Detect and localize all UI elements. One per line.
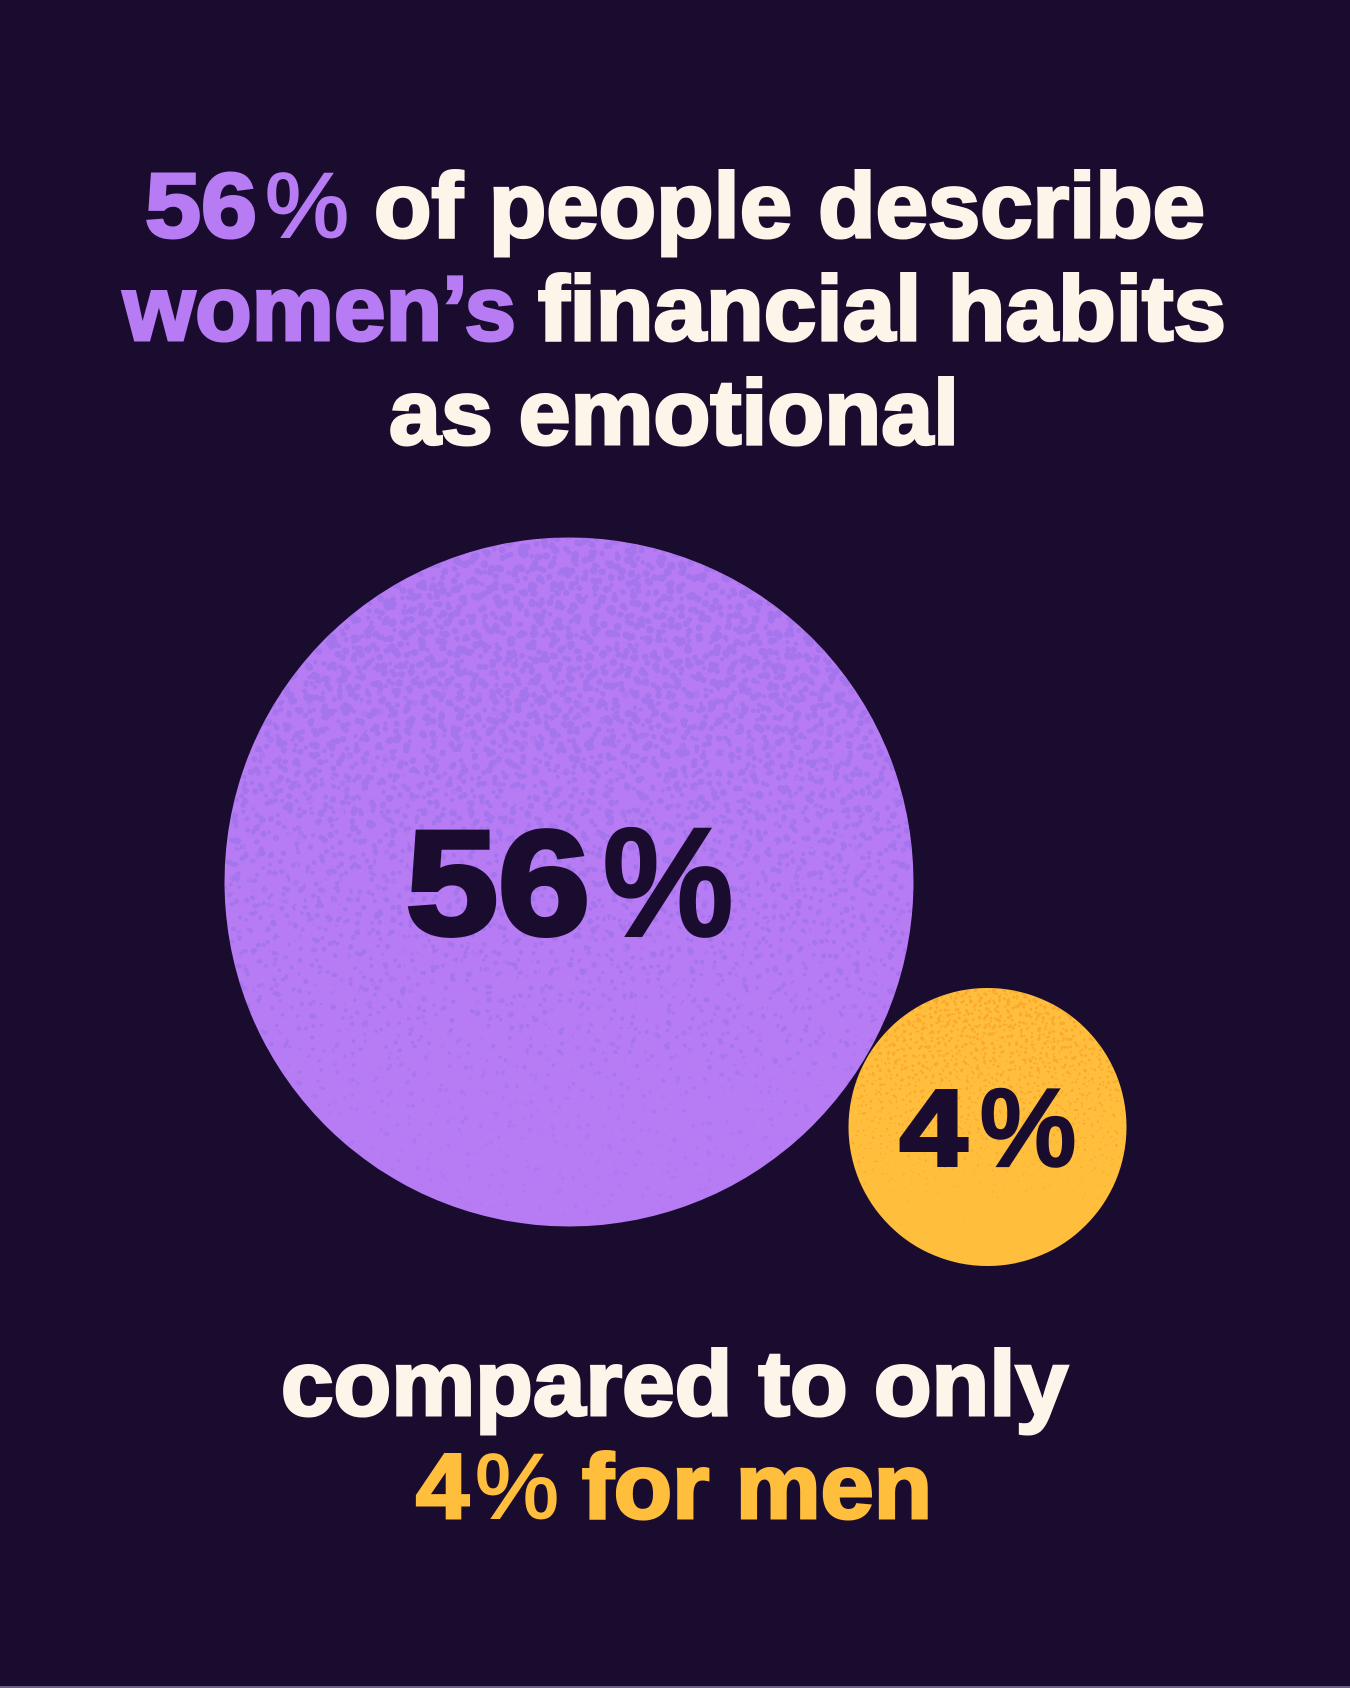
- title: [122, 155, 1226, 464]
- comparison caption: 4: [416, 1436, 469, 1538]
- value: 56%: 56: [406, 801, 590, 966]
- value: 56%: %: [603, 798, 733, 966]
- title: %: [265, 155, 349, 257]
- value: 4%: [900, 1067, 1076, 1188]
- comparison caption: [281, 1333, 1068, 1538]
- circle: 4% men: [848, 988, 1127, 1267]
- circle: 56% women: [224, 537, 914, 1227]
- title: women’s: [122, 258, 516, 360]
- comparison caption: compared to only: [281, 1333, 1068, 1435]
- title: financial habits: [538, 258, 1226, 360]
- comparison caption: %: [475, 1436, 559, 1538]
- value: 56%: [406, 798, 733, 966]
- title: of people describe: [374, 155, 1205, 257]
- value: 4%: %: [980, 1067, 1076, 1188]
- comparison caption: for men: [582, 1436, 932, 1538]
- title: 56: [145, 155, 257, 257]
- value: 4%: 4: [900, 1067, 967, 1188]
- title: as emotional: [389, 362, 959, 464]
